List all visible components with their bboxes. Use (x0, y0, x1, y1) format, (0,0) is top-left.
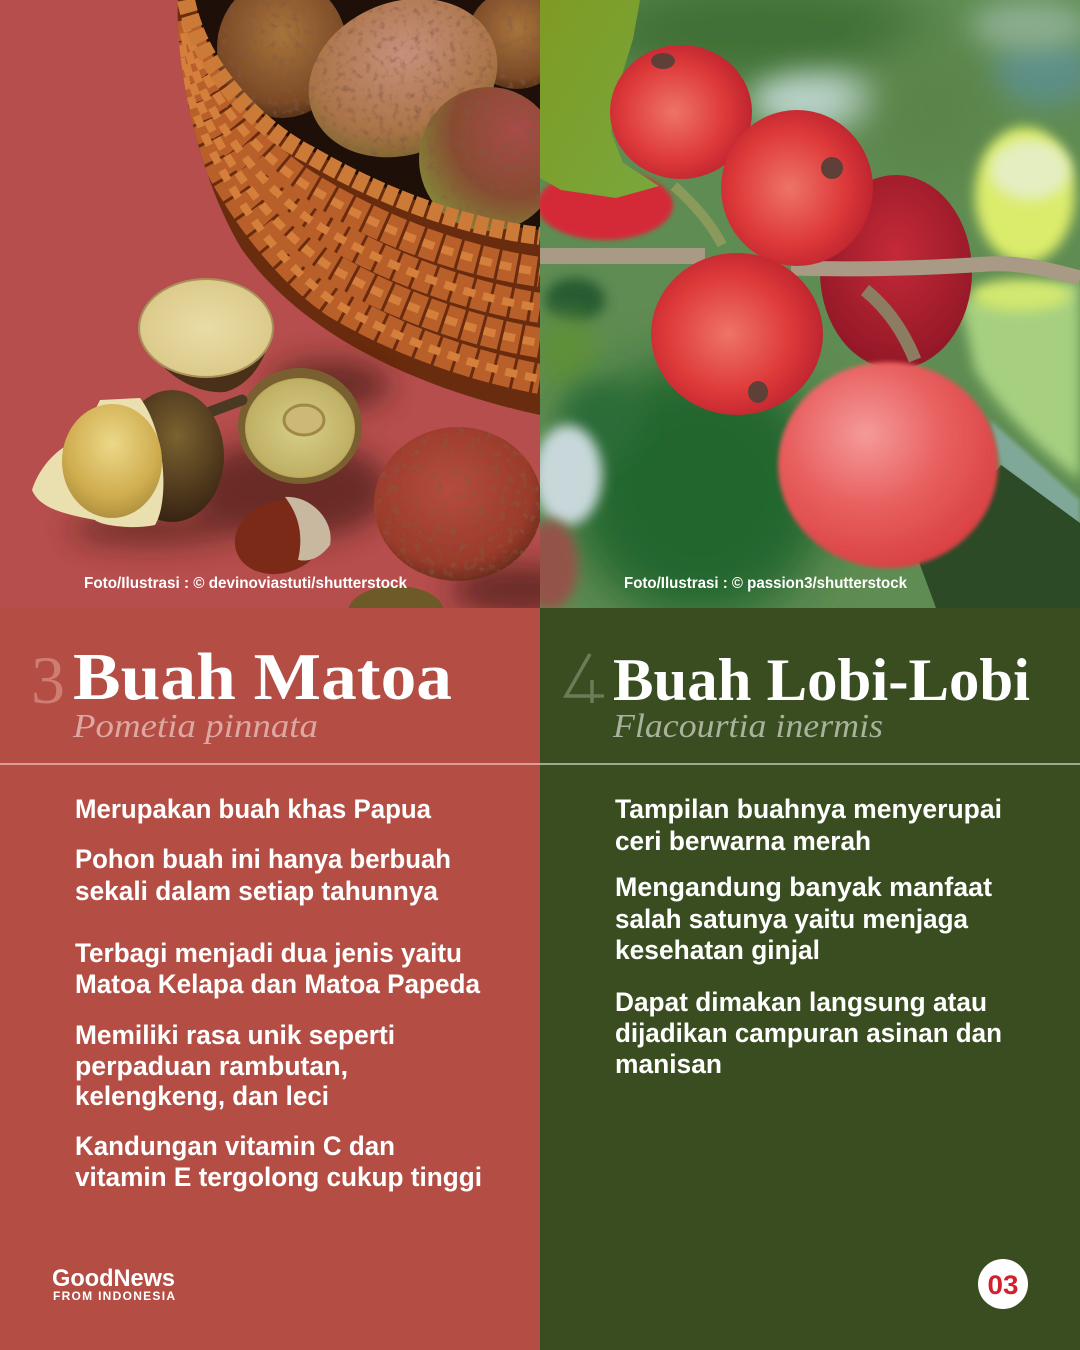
photo credit: right: Foto/Ilustrasi : © passion3/shutterstock (624, 575, 907, 592)
text block: Matoa facts: Terbagi menjadi dua jenis yaitu (75, 938, 462, 968)
branch left (540, 248, 705, 264)
text block: Lobi-Lobi facts (615, 794, 1002, 1079)
empty shell top (139, 279, 273, 392)
text block: Matoa facts: Pohon buah ini hanya berbuah (75, 844, 451, 874)
text block: Matoa facts (75, 794, 482, 1192)
text block: Lobi-Lobi facts: kesehatan ginjal (615, 935, 820, 965)
fruits in basket (217, 0, 567, 231)
branch right (791, 264, 1080, 278)
text block: Lobi-Lobi facts: ceri berwarna merah (615, 826, 871, 856)
text block: Lobi-Lobi facts: dijadikan campuran asinan dan (615, 1018, 1002, 1048)
opened fruit with flesh (32, 390, 242, 527)
text block: Matoa facts: Memiliki rasa unik seperti (75, 1020, 395, 1050)
fruit behind the leaf (537, 170, 673, 240)
basket body (178, 0, 540, 415)
fruit lower (651, 253, 823, 415)
number 4 (566, 654, 604, 703)
text block: Lobi-Lobi facts: salah satunya yaitu menjaga (615, 904, 969, 934)
fruit lower right (374, 427, 542, 581)
basket rim (186, 0, 540, 236)
heading: Buah Lobi-Lobi: Buah Lobi-Lobi (613, 647, 1030, 713)
scientific name: Pometia pinnata: Pometia pinnata (72, 708, 318, 745)
panel: Buah Lobi-Lobi background (540, 608, 1080, 1350)
fruit middle (721, 110, 873, 266)
leaf top left (540, 0, 659, 198)
text block: Lobi-Lobi facts: Dapat dimakan langsung atau (615, 987, 987, 1017)
seed (234, 496, 331, 574)
fruit top (610, 45, 752, 179)
logo: GoodNews from Indonesia: GoodNews (52, 1265, 175, 1292)
panel: Buah Matoa background (0, 608, 540, 1350)
thin stem (674, 186, 722, 245)
divider lines (0, 763, 1080, 765)
back fruit (820, 175, 972, 369)
page number badge (978, 1259, 1028, 1309)
logo: GoodNews from Indonesia: FROM INDONESIA (53, 1289, 175, 1303)
blurred background foliage (522, 0, 1080, 620)
photo: red lobi-lobi fruits on a branch (522, 0, 1080, 620)
text block: Matoa facts: sekali dalam setiap tahunnya (75, 876, 439, 906)
photo: matoa fruits in a woven basket (0, 0, 540, 608)
empty shell with veined interior (238, 368, 362, 484)
text block: Matoa facts: vitamin E tergolong cukup tinggi (75, 1162, 482, 1192)
heading: Buah Matoa: Buah Matoa (73, 640, 452, 714)
text block: Lobi-Lobi facts: Mengandung banyak manfaat (615, 872, 992, 902)
scientific name: Flacourtia inermis: Flacourtia inermis (612, 708, 883, 745)
fruit bottom edge (348, 586, 444, 608)
shadows on table (70, 360, 590, 615)
photo credit: left: Foto/Ilustrasi : © devinoviastuti/shutterstock (84, 575, 407, 592)
fruit calyx marks (651, 53, 843, 403)
text block: Matoa facts: perpaduan rambutan, (75, 1051, 348, 1081)
page number badge: 03 (988, 1270, 1018, 1300)
text block: Lobi-Lobi facts: Tampilan buahnya menyerupai (615, 794, 1002, 824)
text block: Matoa facts: Merupakan buah khas Papua (75, 794, 432, 824)
text block: Matoa facts: Kandungan vitamin C dan (75, 1131, 395, 1161)
text block: Lobi-Lobi facts: manisan (615, 1049, 722, 1079)
twig (865, 290, 915, 360)
text block: Matoa facts: kelengkeng, dan leci (75, 1081, 329, 1111)
text block: Matoa facts: Matoa Kelapa dan Matoa Papeda (75, 969, 481, 999)
fruit foreground (778, 362, 998, 568)
number 3: 3 (31, 642, 65, 718)
